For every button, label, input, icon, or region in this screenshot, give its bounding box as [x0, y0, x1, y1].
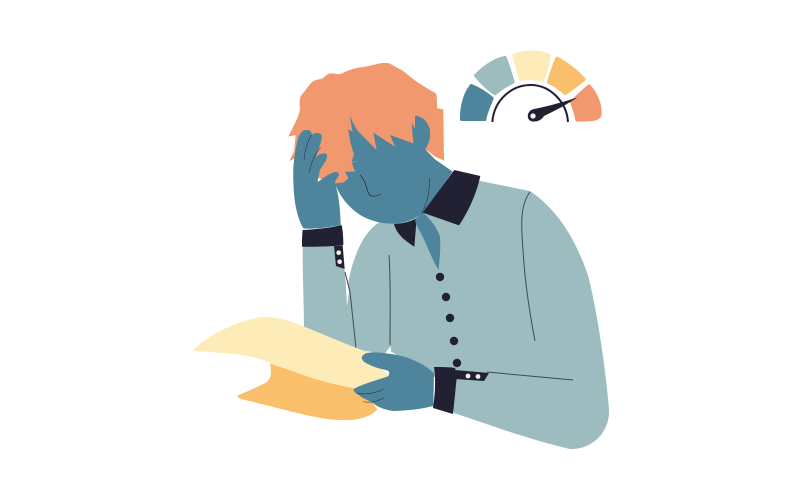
- gauge arc: [492, 85, 568, 122]
- lower hand: [354, 352, 434, 411]
- raised arm cuff: [302, 225, 343, 247]
- white gap above hand: [384, 346, 391, 355]
- gauge segment: orange: [572, 86, 600, 120]
- raised forearm sleeve: [303, 240, 358, 352]
- white gap under raised arm: [345, 270, 349, 306]
- figure: [193, 63, 609, 449]
- cuff placket with buttons: [455, 370, 489, 381]
- finger lines: [304, 135, 321, 173]
- gauge needle pivot: [530, 113, 536, 119]
- gauge segment: teal: [462, 86, 492, 119]
- raised hand: [293, 130, 345, 269]
- icon: stress gauge: [462, 52, 600, 122]
- scarf teal: [415, 213, 440, 270]
- scarf knot dark: [394, 218, 417, 247]
- gauge segment: yellow: [549, 58, 584, 93]
- document back page: [237, 363, 377, 420]
- jaw line: [422, 178, 429, 213]
- gauge segment: light teal: [476, 58, 513, 94]
- nose and mouth line: [360, 175, 381, 196]
- cuff placket with buttons: [334, 245, 345, 269]
- document front page: [193, 317, 390, 388]
- gauge needle: [528, 97, 577, 122]
- shirt torso and sleeve: [347, 181, 609, 449]
- face and ear: [335, 115, 453, 224]
- cuff band: [433, 367, 457, 414]
- shirt buttons: [436, 273, 461, 367]
- finger lines: [357, 389, 384, 402]
- collar: [394, 170, 480, 270]
- gauge segment: cream: [514, 52, 549, 80]
- forearm cuff: [433, 367, 489, 414]
- hair: [288, 63, 444, 183]
- sleeve fold lines: [345, 192, 573, 380]
- document: [193, 317, 391, 420]
